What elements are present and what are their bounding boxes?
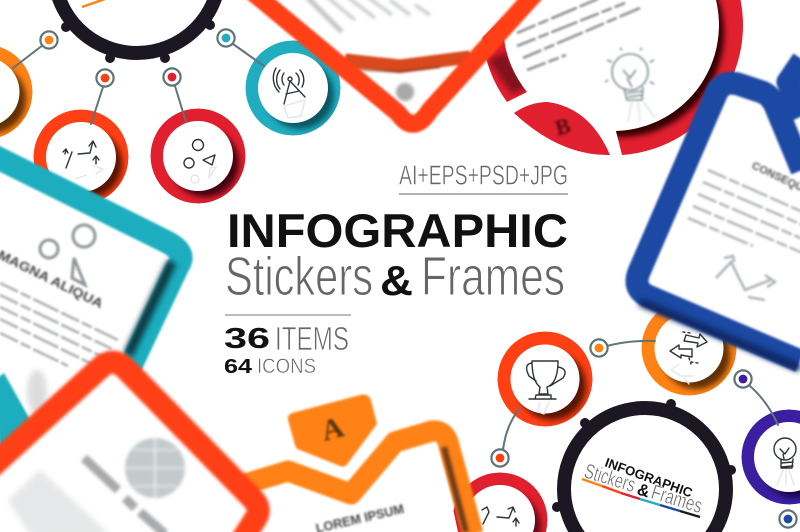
text block in blue frame [688, 170, 800, 254]
frame: blue top right [637, 60, 800, 368]
mini logo: INFOGRAPHIC [603, 455, 695, 500]
connector lines top left [13, 29, 264, 124]
icon: shapes [184, 140, 216, 183]
text block in ring [517, 0, 640, 70]
sticker: orange signpost arrows [642, 312, 736, 396]
subtitle: & [380, 257, 413, 304]
teal tab [0, 373, 32, 456]
count: 36 items: 36 [224, 323, 270, 355]
black ring with logo [552, 399, 736, 532]
divider and counts [224, 315, 351, 378]
frame: red-orange bottom left [0, 362, 258, 532]
mini logo: Frames [649, 481, 705, 518]
count: 64 icons: ICONS [257, 355, 316, 378]
sticker: red-orange trophy [498, 332, 592, 426]
blurred globe blob [396, 83, 414, 101]
globe blurred [125, 438, 185, 498]
mini logo: Stickers [582, 460, 638, 497]
connector lines bottom right [491, 339, 797, 528]
title: INFOGRAPHIC [227, 204, 568, 257]
mini logo [582, 455, 705, 518]
icon: arrows blurred [716, 256, 775, 300]
frame: teal left [0, 154, 181, 456]
icon: trophy [527, 361, 565, 414]
letter A: A [318, 410, 348, 448]
icon: arrows [482, 507, 519, 526]
tab letter [0, 412, 2, 436]
icon: bulb [774, 438, 796, 485]
ring segment [482, 0, 743, 155]
icon: signpost arrows [670, 332, 707, 384]
count: 64 icons: 64 [224, 356, 253, 378]
label tag A [288, 395, 377, 467]
shadow under teal frame [27, 370, 47, 414]
label leaf B [514, 102, 610, 155]
sticker: teal radio tower [246, 40, 340, 136]
frame: orange bottom [245, 395, 473, 532]
heading blurred [84, 458, 165, 532]
icon: light bulb [605, 48, 655, 122]
sticker: red-orange arrows [34, 110, 128, 204]
icon: shapes blurred [40, 225, 95, 285]
letter B: B [552, 113, 573, 141]
blurred text top V [305, 0, 430, 32]
subtitle [225, 245, 565, 307]
sticker: purple bulb [742, 410, 800, 504]
icon: arrows [63, 141, 103, 179]
text block blurred [8, 470, 110, 532]
red ring sticker B [482, 0, 743, 155]
count: 64 icons [224, 355, 316, 378]
sticker: red bottom arrows [452, 472, 548, 532]
icon: radio tower [273, 68, 305, 118]
subtitle: Stickers [225, 245, 373, 307]
black ring top left [54, 0, 220, 63]
count: 36 items [224, 320, 349, 357]
text block in teal frame [0, 283, 118, 367]
mini logo: & [635, 480, 652, 501]
sticker: orange left edge [0, 44, 32, 140]
heading: format list: AI+EPS+PSD+JPG [399, 160, 568, 190]
frame: red-orange top V [250, 0, 540, 124]
subtitle: Frames [421, 245, 565, 307]
count: 36 items: ITEMS [275, 320, 349, 357]
sticker: red shapes [150, 108, 246, 204]
